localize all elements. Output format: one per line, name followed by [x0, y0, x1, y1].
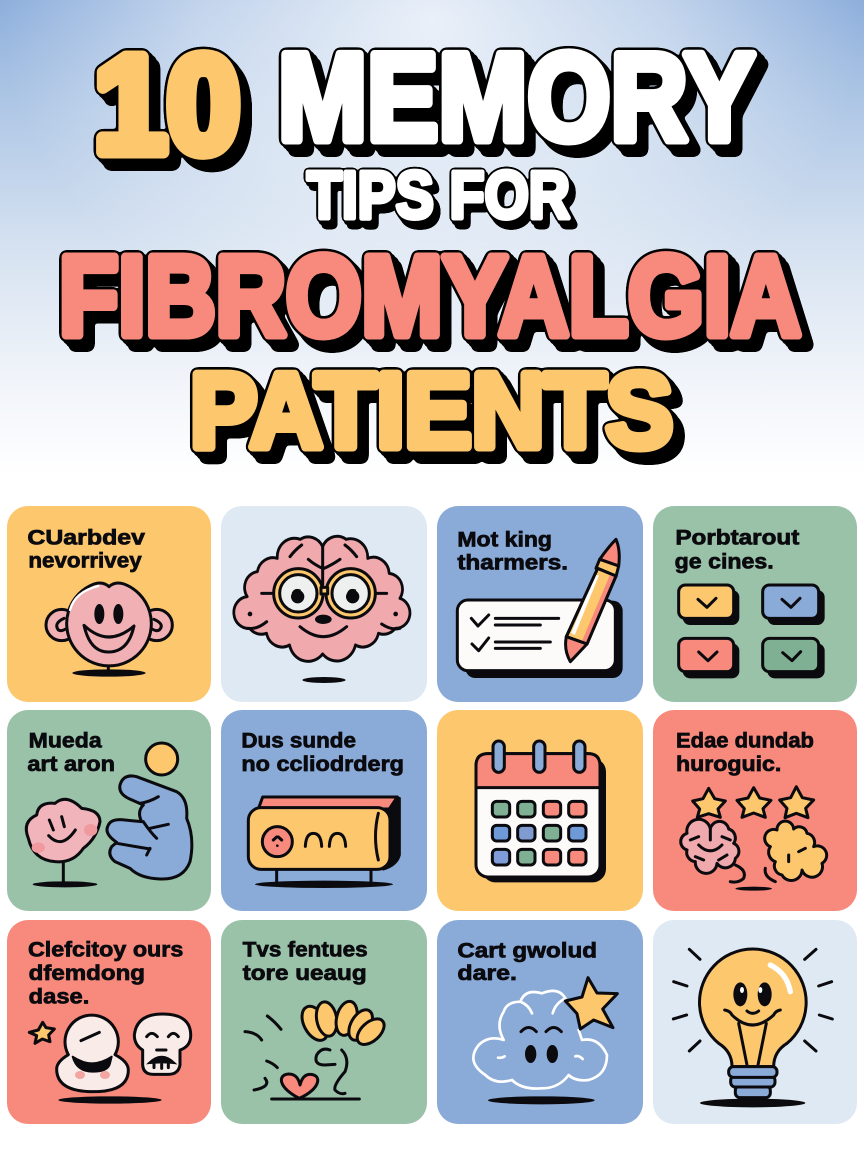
- panel text: Mot king: [457, 529, 552, 552]
- icon: big star: [565, 978, 617, 1029]
- panel text: [241, 730, 404, 776]
- panel text: nevorrivey: [28, 550, 142, 573]
- panel text: Cart gwolud: [457, 939, 597, 962]
- panel text: art aron: [27, 753, 115, 776]
- panel text: [676, 729, 814, 776]
- icon: laughing face: [57, 1015, 162, 1104]
- panel: brain and hand: [7, 710, 211, 911]
- icon: pencil: [566, 539, 619, 662]
- icon: pink brain: [681, 819, 744, 882]
- panel text: [675, 526, 799, 573]
- panel: calendar: [437, 710, 643, 911]
- icon: yellow fingers: [297, 999, 389, 1049]
- icon: yellow device: [248, 797, 399, 888]
- panel text: ge cines.: [675, 550, 774, 573]
- panel: stars and brains: [653, 710, 857, 911]
- title word: PATIENTS: PATIENTS: [190, 352, 673, 470]
- panel text: dare.: [457, 962, 517, 985]
- icon: smiling brain on stand: [26, 799, 100, 887]
- panel text: no ccliodrderg: [241, 753, 404, 776]
- panel text: [243, 939, 368, 985]
- panel: cloud and star: [437, 920, 643, 1124]
- icon: checklist note: [457, 600, 623, 678]
- panel: face with ears: [7, 506, 211, 702]
- panel text: Dus sunde: [241, 730, 356, 753]
- panel text: Tvs fentues: [243, 939, 368, 962]
- panel: four check buttons: [653, 506, 857, 702]
- icon: three stars: [693, 787, 814, 818]
- panel text: Clefcitoy ours: [28, 939, 183, 962]
- icon: sun: [146, 743, 178, 775]
- icon: brain with glasses: [234, 536, 410, 683]
- panel text: tore ueaug: [243, 962, 367, 985]
- panel: fingers and heart: [221, 920, 427, 1124]
- panel text: Mueda: [29, 730, 102, 753]
- panel: light bulb: [653, 920, 857, 1124]
- panel text: [27, 526, 145, 573]
- panel text: dfemdong: [29, 962, 145, 985]
- icon: check buttons: [679, 585, 825, 678]
- icon: hand: [107, 776, 192, 879]
- panel text: dase.: [29, 985, 89, 1008]
- panel text: Edae dundab: [676, 729, 814, 752]
- panel text: [457, 529, 568, 574]
- icon: calendar: [476, 741, 606, 882]
- panel text: tharmers.: [457, 551, 568, 574]
- title words: TIPS FOR: TIPS FOR: [307, 158, 570, 233]
- panel: brain with glasses: [221, 506, 427, 702]
- icon: cloud: [473, 991, 607, 1104]
- icon: motion lines and heart: [245, 1016, 359, 1099]
- title word: MEMORY: MEMORY: [278, 29, 755, 167]
- panel text: Porbtarout: [675, 526, 799, 549]
- icon: mushroom face: [134, 1014, 191, 1074]
- panel text: [28, 939, 183, 1008]
- title word: 10: 10: [94, 28, 240, 182]
- icon: smiling light bulb: [673, 949, 832, 1107]
- icon: yellow brain: [735, 821, 827, 891]
- panel: checklist and pencil: [437, 506, 643, 702]
- title: [59, 28, 801, 470]
- icon: small star: [29, 1022, 54, 1043]
- panel text: [27, 730, 115, 776]
- panel: device: [221, 710, 427, 911]
- panel text: CUarbdev: [27, 526, 145, 549]
- panel text: huroguic.: [676, 753, 781, 776]
- panel: two faces: [7, 920, 211, 1124]
- icon: smiling head: [46, 583, 172, 677]
- panel text: [457, 939, 597, 985]
